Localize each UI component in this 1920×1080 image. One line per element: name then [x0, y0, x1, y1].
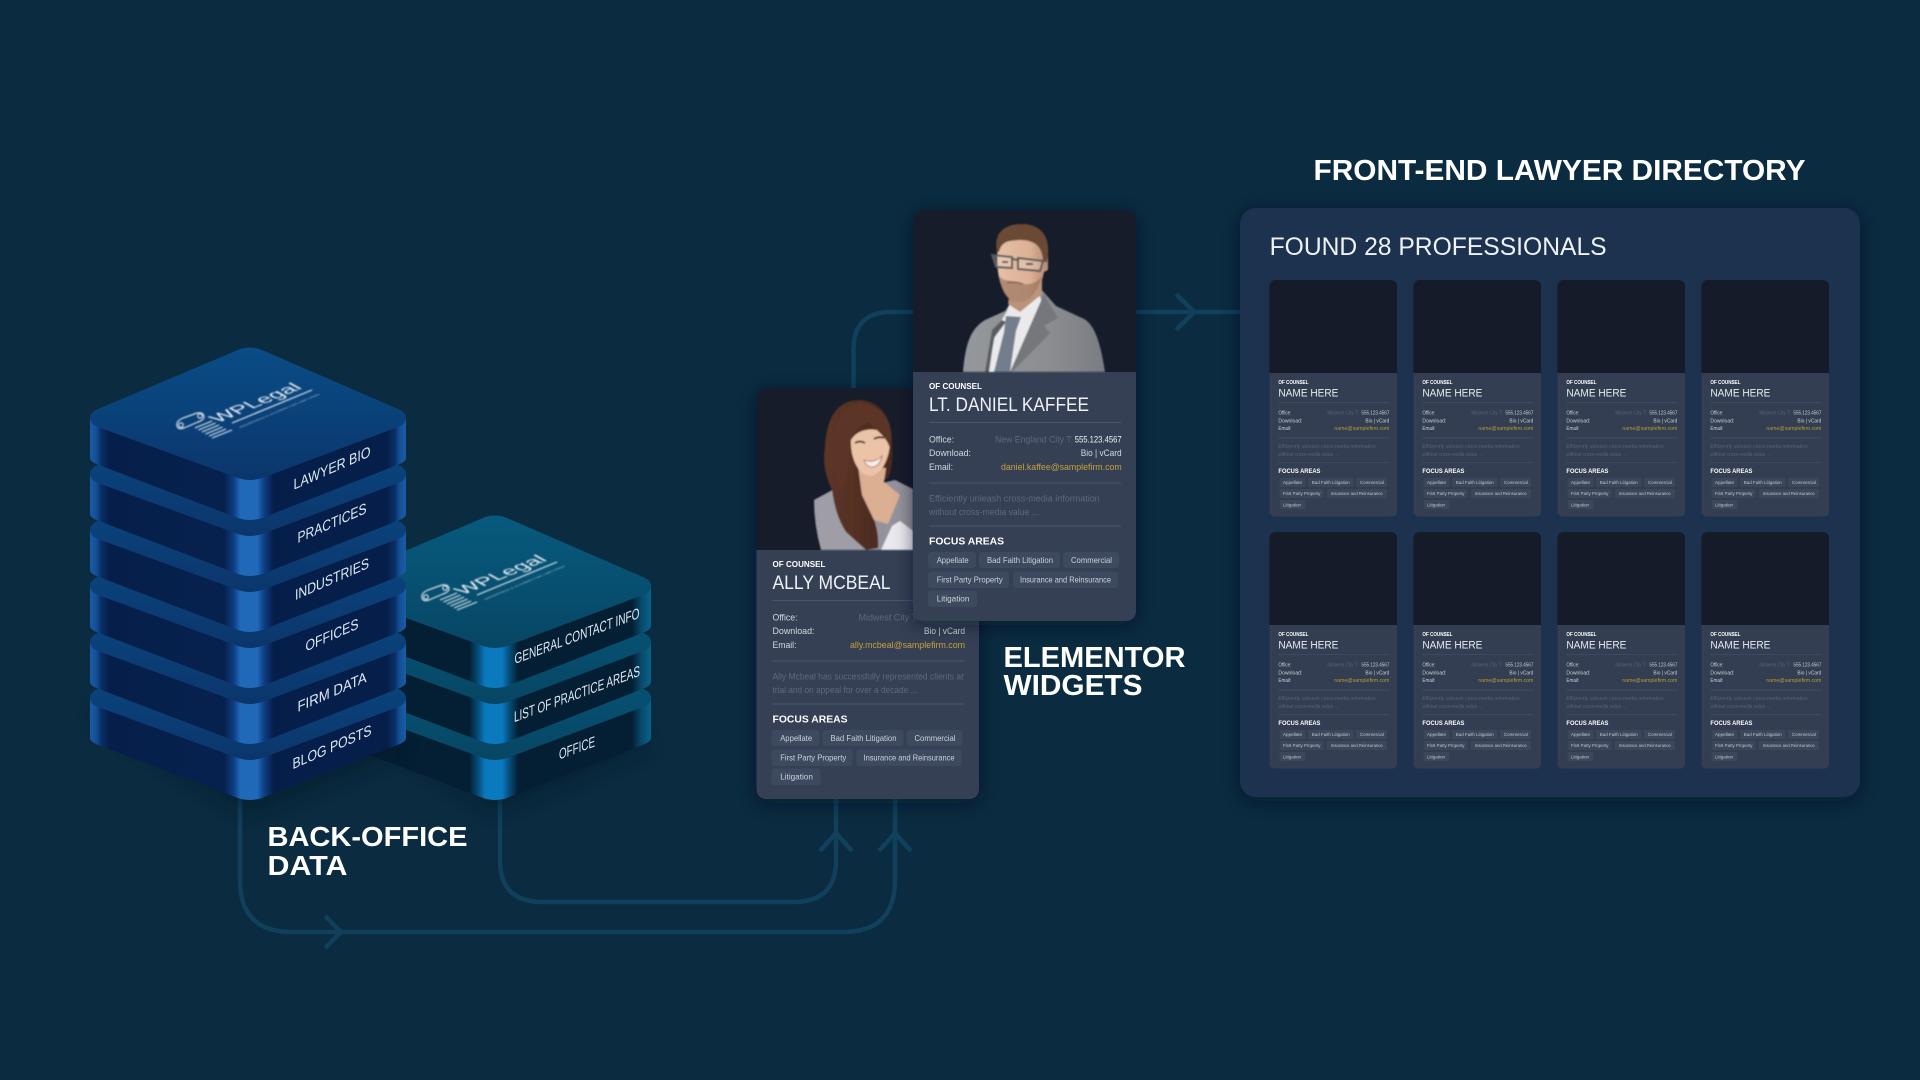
mini card 1: Office:	[1278, 410, 1291, 416]
mini card 2: without cross-media value ...	[1422, 452, 1482, 458]
mini card 6: Litigation	[1427, 754, 1446, 760]
mini card 3: Download:	[1566, 418, 1590, 424]
mini card 1: Efficiently unleash cross-media information	[1278, 444, 1376, 450]
contact details: Download:	[772, 626, 814, 637]
heading: front-end lawyer directory: FRONT-END LAWYER DIRECTORY	[1314, 155, 1806, 187]
mini card 7: name@samplefirm.com	[1622, 678, 1677, 684]
mini card 4: Office:	[1710, 410, 1723, 416]
label: blog posts: BLOG POSTS	[292, 722, 372, 773]
name: NAME HERE	[1422, 388, 1482, 400]
mini card 7: Litigation	[1571, 754, 1590, 760]
mini card 5: OF COUNSEL	[1278, 632, 1308, 638]
mini card 5: Bad Faith Litigation	[1312, 732, 1351, 737]
focus areas heading: FOCUS AREAS	[929, 536, 1004, 548]
mini card 7: Midwest City T:	[1615, 662, 1646, 668]
mini card 2: First Party Property	[1427, 491, 1465, 496]
mini card 2: 555.123.4567	[1505, 410, 1534, 416]
mini card 2: Midwest City T:	[1471, 410, 1502, 416]
mini card 1: Bad Faith Litigation	[1312, 480, 1351, 485]
mini card 2: name@samplefirm.com	[1478, 426, 1533, 432]
mini card 5: without cross-media value ...	[1278, 704, 1338, 710]
logo: secondary stack: WPLegal	[450, 553, 552, 597]
mini card 7	[1557, 532, 1685, 769]
logo: primary stack	[177, 381, 321, 438]
mini card 6: Bio | vCard	[1509, 670, 1534, 676]
mini card 6: Bad Faith Litigation	[1456, 732, 1495, 737]
mini card 8: Litigation	[1715, 754, 1734, 760]
label: general contact info: GENERAL CONTACT INFO	[515, 605, 639, 668]
label: office: OFFICE	[559, 734, 595, 764]
mini card 6: OF COUNSEL	[1422, 632, 1452, 638]
mini card 8: Commercial	[1792, 732, 1816, 737]
arrow: chevron to directory	[1176, 294, 1194, 330]
mini card 4: name@samplefirm.com	[1766, 426, 1821, 432]
mini card 2: Office:	[1422, 410, 1435, 416]
mini card 1: FOCUS AREAS	[1278, 469, 1320, 475]
heading: elementor widgets: WIDGETS	[1004, 670, 1142, 702]
mini card 1: First Party Property	[1283, 491, 1321, 496]
mini card 8: without cross-media value ...	[1710, 704, 1770, 710]
mini card 8: Appellate	[1715, 732, 1735, 737]
mini card 8: Insurance and Reinsurance	[1763, 743, 1815, 748]
mini card 1: Download:	[1278, 418, 1302, 424]
mini card 4	[1701, 280, 1829, 517]
focus area tags: Insurance and Reinsurance	[1020, 574, 1111, 584]
mini card 4: Email:	[1710, 426, 1723, 432]
focus area tags: Commercial	[914, 733, 956, 743]
mini card 5: Commercial	[1360, 732, 1384, 737]
mini card 4: Litigation	[1715, 502, 1734, 508]
mini card 3: Email:	[1566, 426, 1579, 432]
name: LT. DANIEL KAFFEE	[929, 394, 1089, 416]
mini card 3: name@samplefirm.com	[1622, 426, 1677, 432]
contact details: Download:	[929, 448, 971, 459]
heading: back-office data: DATA	[268, 850, 348, 881]
mini card 1: Litigation	[1283, 502, 1302, 508]
mini card 5: Office:	[1278, 662, 1291, 668]
mini card 2: Commercial	[1504, 480, 1528, 485]
arrow: up chevron right	[879, 833, 911, 851]
mini card 8: Download:	[1710, 670, 1734, 676]
mini card 7: Bio | vCard	[1653, 670, 1678, 676]
mini card 3: without cross-media value ...	[1566, 452, 1626, 458]
contact details: Email:	[929, 462, 953, 473]
mini card 2: OF COUNSEL	[1422, 380, 1452, 386]
arrow: right chevron on lower line	[325, 916, 341, 948]
name: NAME HERE	[1710, 388, 1770, 400]
mini card 6: without cross-media value ...	[1422, 704, 1482, 710]
label: firm data: FIRM DATA	[298, 669, 367, 716]
mini card 2: Download:	[1422, 418, 1446, 424]
card: Ally McBeal	[756, 388, 979, 799]
mini card 4: OF COUNSEL	[1710, 380, 1740, 386]
mini card 3: FOCUS AREAS	[1566, 469, 1608, 475]
mini card 2: FOCUS AREAS	[1422, 469, 1464, 475]
mini card 8: 555.123.4567	[1793, 662, 1822, 668]
mini card 1: without cross-media value ...	[1278, 452, 1338, 458]
focus area tags: Bad Faith Litigation	[830, 733, 897, 743]
mini card 6: Appellate	[1427, 732, 1447, 737]
focus area tags: Commercial	[1071, 555, 1112, 565]
label: lawyer bio: LAWYER BIO	[294, 444, 370, 494]
mini card 8: Email:	[1710, 678, 1723, 684]
mini card 7: Download:	[1566, 670, 1590, 676]
mini card 7: without cross-media value ...	[1566, 704, 1626, 710]
mini card 5: Bio | vCard	[1365, 670, 1390, 676]
mini card 1: Appellate	[1283, 480, 1303, 485]
mini card 7: Bad Faith Litigation	[1600, 732, 1639, 737]
stack: secondary data layers	[335, 516, 651, 810]
contact details: ally.mcbeal@samplefirm.com	[850, 640, 965, 651]
mini card 2: Email:	[1422, 426, 1435, 432]
mini card 5: Appellate	[1283, 732, 1303, 737]
stack: primary data layers	[90, 348, 406, 814]
focus area tags: Insurance and Reinsurance	[864, 752, 955, 762]
mini card 4: FOCUS AREAS	[1710, 469, 1752, 475]
mini card 2: Appellate	[1427, 480, 1447, 485]
focus area tags: Appellate	[937, 555, 969, 565]
mini card 7: FOCUS AREAS	[1566, 721, 1608, 727]
mini card 4: Midwest City T:	[1759, 410, 1790, 416]
icon: column	[422, 585, 477, 610]
mini card 6: Efficiently unleash cross-media information	[1422, 696, 1520, 702]
name: ALLY MCBEAL	[772, 572, 891, 594]
panel: directory	[1240, 208, 1860, 797]
mini card 7: Insurance and Reinsurance	[1619, 743, 1671, 748]
role: OF COUNSEL	[772, 560, 826, 569]
mini card 5: name@samplefirm.com	[1334, 678, 1389, 684]
contact details: 555.123.4567	[1075, 434, 1122, 445]
contact details	[772, 612, 965, 651]
mini card 1: OF COUNSEL	[1278, 380, 1308, 386]
mini card 5: Insurance and Reinsurance	[1331, 743, 1383, 748]
focus area tags	[772, 730, 962, 785]
heading: elementor widgets	[1004, 642, 1186, 702]
focus area tags: First Party Property	[937, 574, 1003, 584]
mini card 7: Email:	[1566, 678, 1579, 684]
panel heading: FOUND 28 PROFESSIONALS	[1270, 233, 1607, 261]
mini card 8: FOCUS AREAS	[1710, 721, 1752, 727]
mini card 4: 555.123.4567	[1793, 410, 1822, 416]
mini card 5: Email:	[1278, 678, 1291, 684]
contact details	[929, 434, 1122, 473]
bio: trial and on appeal for over a decade ...	[772, 685, 918, 696]
mini card 8: name@samplefirm.com	[1766, 678, 1821, 684]
connector: widgets to directory	[854, 294, 1242, 392]
mini card 1: name@samplefirm.com	[1334, 426, 1389, 432]
contact details: Bio | vCard	[1081, 448, 1122, 459]
heading: elementor widgets: ELEMENTOR	[1004, 642, 1186, 674]
label: list of practice areas: LIST OF PRACTICE AREAS	[514, 663, 640, 726]
mini card 1: 555.123.4567	[1361, 410, 1390, 416]
contact details: Office:	[929, 434, 954, 445]
role: OF COUNSEL	[929, 382, 982, 391]
mini card 6: Office:	[1422, 662, 1435, 668]
label: practices: PRACTICES	[298, 500, 366, 547]
contact details: Office:	[772, 612, 798, 623]
mini card 4: First Party Property	[1715, 491, 1753, 496]
name: NAME HERE	[1566, 388, 1626, 400]
mini card 5: Midwest City T:	[1327, 662, 1358, 668]
icon: column	[177, 413, 232, 438]
mini card 8: Midwest City T:	[1759, 662, 1790, 668]
mini card 2	[1413, 280, 1541, 517]
mini card 3: Appellate	[1571, 480, 1591, 485]
bio: Efficiently unleash cross-media information	[929, 493, 1100, 504]
connector: stack two to widgets	[500, 798, 852, 902]
heading: back-office data	[268, 821, 468, 881]
mini card 2: Bio | vCard	[1509, 418, 1534, 424]
portrait: man	[963, 224, 1105, 372]
mini card 6: Email:	[1422, 678, 1435, 684]
logo: secondary stack	[422, 553, 566, 610]
mini card 3: Insurance and Reinsurance	[1619, 491, 1671, 496]
focus area tags: Litigation	[780, 772, 813, 782]
mini card 8: Bad Faith Litigation	[1744, 732, 1783, 737]
mini card 5	[1269, 532, 1397, 769]
mini card 4: Efficiently unleash cross-media information	[1710, 444, 1808, 450]
portrait: woman	[814, 400, 913, 550]
contact details: daniel.kaffee@samplefirm.com	[1001, 462, 1122, 473]
label: industries: INDUSTRIES	[295, 555, 369, 604]
mini card 2: Litigation	[1427, 502, 1446, 508]
focus areas heading: FOCUS AREAS	[772, 714, 848, 726]
mini card 3	[1557, 280, 1685, 517]
mini card 6: 555.123.4567	[1505, 662, 1534, 668]
mini card 3: Office:	[1566, 410, 1579, 416]
mini card 4: without cross-media value ...	[1710, 452, 1770, 458]
mini card 1	[1269, 280, 1397, 517]
mini card 2: Insurance and Reinsurance	[1475, 491, 1527, 496]
mini card 6: Insurance and Reinsurance	[1475, 743, 1527, 748]
mini card 7: OF COUNSEL	[1566, 632, 1596, 638]
mini card 8: Efficiently unleash cross-media information	[1710, 696, 1808, 702]
mini card 5: First Party Property	[1283, 743, 1321, 748]
name: NAME HERE	[1278, 640, 1338, 652]
mini card 8: First Party Property	[1715, 743, 1753, 748]
mini card 6: name@samplefirm.com	[1478, 678, 1533, 684]
card: Daniel Kaffee	[913, 210, 1136, 621]
focus area tags	[928, 552, 1119, 607]
mini card 7: First Party Property	[1571, 743, 1609, 748]
contact details: Bio | vCard	[924, 626, 965, 637]
name: NAME HERE	[1422, 640, 1482, 652]
mini card 8	[1701, 532, 1829, 769]
focus area tags: Appellate	[780, 733, 812, 743]
mini card 1: Midwest City T:	[1327, 410, 1358, 416]
mini card 3: Litigation	[1571, 502, 1590, 508]
mini card 8: Office:	[1710, 662, 1723, 668]
mini card 4: Appellate	[1715, 480, 1735, 485]
focus area tags: First Party Property	[780, 752, 847, 762]
bio: Ally Mcbeal has successfully represented clients at	[772, 671, 964, 682]
bio	[928, 493, 1100, 518]
logo: primary stack: WORDPRESS & SYSTEMS FOR LAW FIRMS	[238, 393, 321, 428]
name: NAME HERE	[1566, 640, 1626, 652]
mini card 2: Efficiently unleash cross-media information	[1422, 444, 1520, 450]
label: offices: OFFICES	[305, 616, 359, 655]
mini card 8: Bio | vCard	[1797, 670, 1822, 676]
mini card 2: Bad Faith Litigation	[1456, 480, 1495, 485]
mini card 6: First Party Property	[1427, 743, 1465, 748]
focus area tags: Bad Faith Litigation	[987, 555, 1053, 565]
mini card 5: 555.123.4567	[1361, 662, 1390, 668]
mini card 1: Email:	[1278, 426, 1291, 432]
mini card 3: OF COUNSEL	[1566, 380, 1596, 386]
mini card 4: Insurance and Reinsurance	[1763, 491, 1815, 496]
bio	[772, 671, 964, 696]
contact details: New England City T:	[995, 434, 1073, 445]
mini card 4: Download:	[1710, 418, 1734, 424]
mini card 3: Commercial	[1648, 480, 1672, 485]
mini card 5: FOCUS AREAS	[1278, 721, 1320, 727]
name: NAME HERE	[1710, 640, 1770, 652]
bio: without cross-media value ...	[928, 507, 1039, 518]
mini card 1: Bio | vCard	[1365, 418, 1390, 424]
mini card 4: Bio | vCard	[1797, 418, 1822, 424]
mini card 7: Commercial	[1648, 732, 1672, 737]
mini card 4: Commercial	[1792, 480, 1816, 485]
mini card 5: Efficiently unleash cross-media information	[1278, 696, 1376, 702]
mini card 6: Commercial	[1504, 732, 1528, 737]
contact details: Midwest City T:	[858, 612, 918, 623]
mini card 3: Bio | vCard	[1653, 418, 1678, 424]
mini card 6: FOCUS AREAS	[1422, 721, 1464, 727]
mini card 6	[1413, 532, 1541, 769]
mini card 1: Commercial	[1360, 480, 1384, 485]
name: NAME HERE	[1278, 388, 1338, 400]
mini card 5: Download:	[1278, 670, 1302, 676]
arrow: up chevron left	[820, 833, 852, 851]
mini card 6: Midwest City T:	[1471, 662, 1502, 668]
mini card 3: Bad Faith Litigation	[1600, 480, 1639, 485]
mini card 8: OF COUNSEL	[1710, 632, 1740, 638]
mini card 3: Efficiently unleash cross-media information	[1566, 444, 1664, 450]
mini card 7: Appellate	[1571, 732, 1591, 737]
mini card 7: 555.123.4567	[1649, 662, 1678, 668]
logo: secondary stack: WORDPRESS & SYSTEMS FOR LAW FIRMS	[483, 565, 566, 600]
connector: stack one to widgets	[240, 798, 911, 948]
mini card 3: 555.123.4567	[1649, 410, 1678, 416]
contact details: Email:	[772, 640, 796, 651]
mini card 3: Midwest City T:	[1615, 410, 1646, 416]
mini card 7: Office:	[1566, 662, 1579, 668]
mini card 6: Download:	[1422, 670, 1446, 676]
heading: back-office data: BACK-OFFICE	[268, 821, 468, 852]
mini card 7: Efficiently unleash cross-media information	[1566, 696, 1664, 702]
mini card 3: First Party Property	[1571, 491, 1609, 496]
mini card 1: Insurance and Reinsurance	[1331, 491, 1383, 496]
focus area tags: Litigation	[937, 594, 970, 604]
logo: primary stack: WPLegal	[205, 381, 307, 425]
mini card 5: Litigation	[1283, 754, 1302, 760]
mini card 4: Bad Faith Litigation	[1744, 480, 1783, 485]
